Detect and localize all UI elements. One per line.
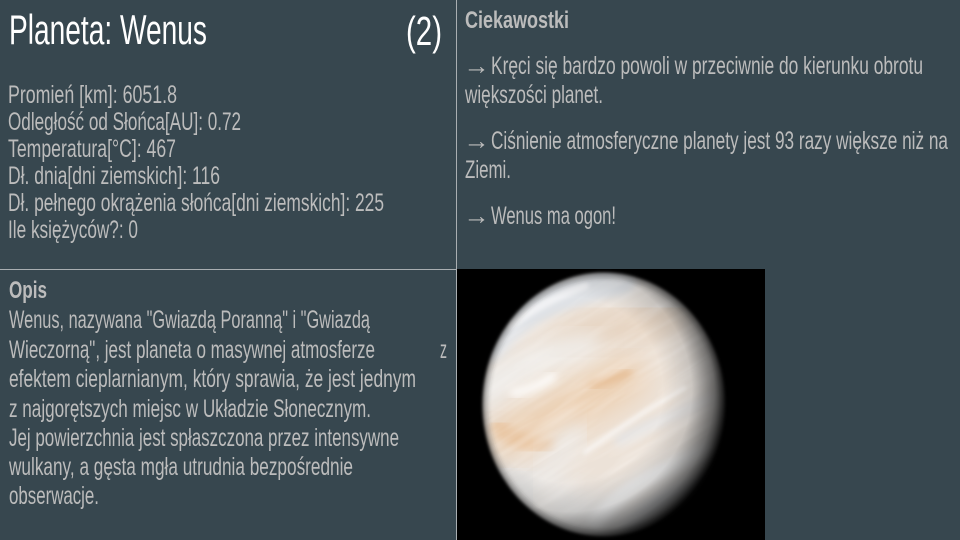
panel: planet statistics xyxy=(8,81,384,244)
description text xyxy=(8,306,447,510)
panel: planet statistics: Odległość od Słońca[AU]: 0.72 xyxy=(8,108,241,136)
description text: obserwacje. xyxy=(9,482,99,510)
fact 2: Ziemi. xyxy=(465,156,511,184)
panel: planet statistics: Temperatura[°C]: 467 xyxy=(8,135,176,163)
description text: Wenus, nazywana "Gwiazdą Poranną" i "Gwiazdą xyxy=(9,306,370,334)
fact 1 xyxy=(464,52,923,109)
title: Planeta: Wenus xyxy=(9,6,207,53)
description text: Wieczorną", jest planeta o masywnej atmosferze xyxy=(9,336,375,364)
fact 2 xyxy=(464,127,948,184)
fact 2: → xyxy=(464,128,490,155)
panel: planet statistics: Dł. dnia[dni ziemskich]: 116 xyxy=(8,162,220,190)
horizontal divider xyxy=(0,269,457,270)
cloud texture xyxy=(502,308,676,468)
fact 3: → xyxy=(464,203,490,230)
description text: Jej powierzchnia jest spłaszczona przez intensywne xyxy=(9,424,399,452)
description text: z xyxy=(440,336,447,364)
fact 1: → xyxy=(464,53,490,80)
description heading: Opis xyxy=(9,277,47,304)
panel: planet statistics: Dł. pełnego okrążenia słońca[dni ziemskich]: 225 xyxy=(8,189,384,217)
description text: z najgorętszych miejsc w Układzie Słonecznym. xyxy=(9,395,371,423)
terminator shading xyxy=(498,272,728,538)
fact 3: Wenus ma ogon! xyxy=(491,202,616,230)
panel: fun facts xyxy=(464,7,948,230)
fun facts heading: Ciekawostki xyxy=(465,7,569,34)
panel: planet statistics: Promień [km]: 6051.8 xyxy=(8,81,177,109)
limb shading xyxy=(485,276,723,534)
cloud colours xyxy=(486,280,722,528)
planet number: (2) xyxy=(406,8,442,54)
panel: planet statistics: Ile księżyców?: 0 xyxy=(8,216,138,244)
vertical divider xyxy=(456,0,457,540)
description text: efektem cieplarnianym, który sprawia, że jest jednym xyxy=(9,365,416,393)
image: planet Venus xyxy=(457,269,765,540)
fact 1: większości planet. xyxy=(464,81,603,109)
fact 3 xyxy=(464,202,616,230)
description text: wulkany, a gęsta mgła utrudnia bezpośrednie xyxy=(8,453,353,481)
panel: description xyxy=(8,277,447,510)
